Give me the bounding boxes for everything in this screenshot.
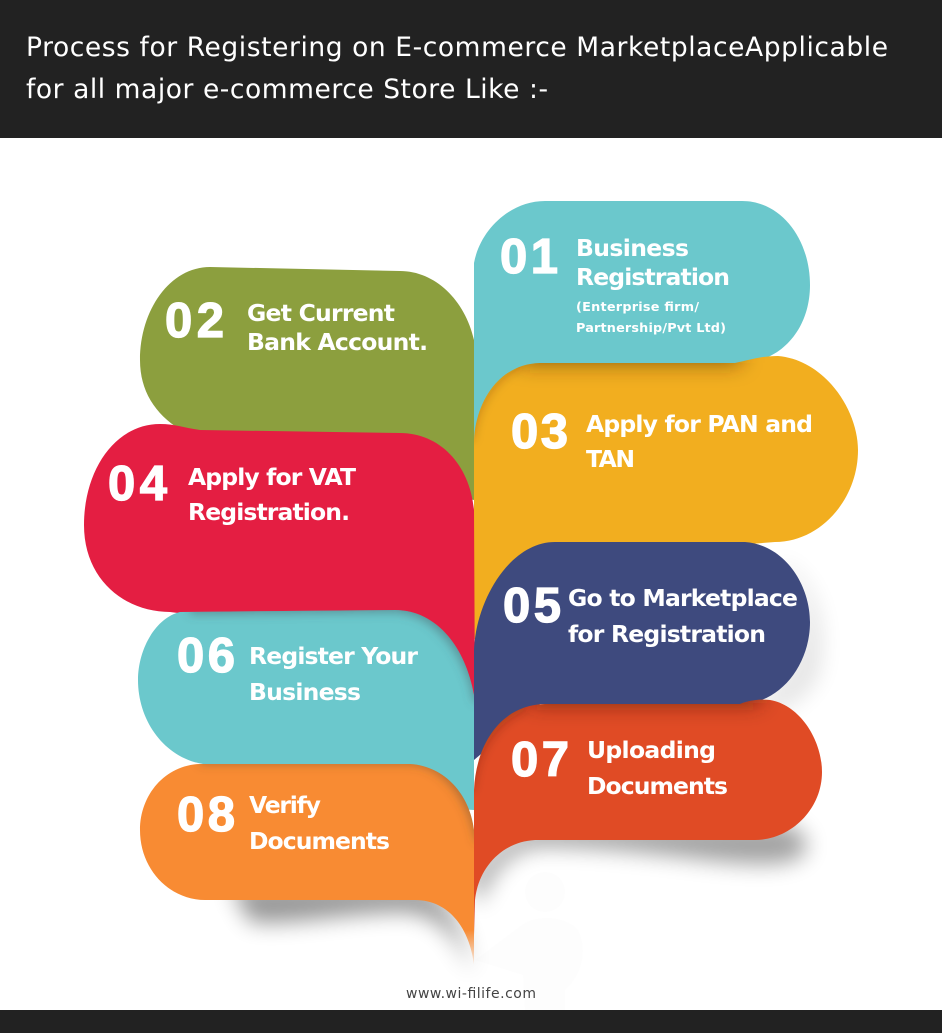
bubble 05 navy: [474, 542, 810, 760]
number 03: 03: [511, 405, 568, 459]
header bar: [0, 0, 942, 138]
bubble 03 yellow: [468, 350, 858, 640]
label 05: for Registration: [568, 620, 766, 648]
label 01: Partnership/Pvt Ltd): [576, 321, 726, 336]
label 04: Apply for VAT: [188, 463, 356, 491]
label 03: Apply for PAN and: [586, 410, 813, 438]
label 02: [247, 299, 428, 356]
number 01: 01: [500, 230, 558, 284]
number 06: 06: [177, 629, 235, 683]
label 05: Go to Marketplace: [568, 584, 798, 612]
label 04: Registration.: [188, 498, 350, 526]
label 06: [249, 642, 418, 706]
ghost figure: [475, 872, 583, 1010]
label 07: [587, 736, 728, 800]
label 08: Documents: [249, 827, 390, 855]
label 02: Bank Account.: [247, 328, 428, 356]
label 06: Business: [249, 678, 361, 706]
label 01: (Enterprise firm/: [576, 300, 699, 315]
label 08: [249, 791, 390, 855]
label 06: Register Your: [249, 642, 418, 670]
bubble 01 teal: [474, 201, 810, 460]
label 03: TAN: [586, 445, 635, 473]
title: for all major e-commerce Store Like :-: [26, 74, 548, 105]
bubble 04 red: [84, 424, 475, 705]
bubble 07 orange-red: [468, 690, 822, 935]
bubble 06 teal: [138, 598, 488, 810]
label 07: Uploading: [587, 736, 716, 764]
label 01: Business: [576, 234, 689, 262]
number 07: 07: [511, 733, 569, 787]
bubble 02 olive: [140, 267, 474, 500]
label 04: [188, 463, 356, 526]
drop shadows: [230, 560, 822, 975]
label 01: Registration: [576, 263, 730, 291]
label 05: [568, 584, 798, 648]
bubble 08 orange: [140, 752, 488, 965]
label 03: [586, 410, 813, 473]
label 08: Verify: [249, 791, 321, 819]
label 01: [576, 234, 730, 336]
title: [26, 32, 888, 105]
number 02: 02: [165, 294, 224, 348]
number 08: 08: [177, 788, 235, 842]
label 02: Get Current: [247, 299, 395, 327]
label 07: Documents: [587, 772, 728, 800]
number 04: 04: [108, 457, 167, 511]
footer bar: [0, 1010, 942, 1033]
title: Process for Registering on E-commerce MarketplaceApplicable: [26, 32, 888, 63]
number 05: 05: [503, 579, 561, 633]
website url: www.wi-filife.com: [406, 986, 536, 1002]
